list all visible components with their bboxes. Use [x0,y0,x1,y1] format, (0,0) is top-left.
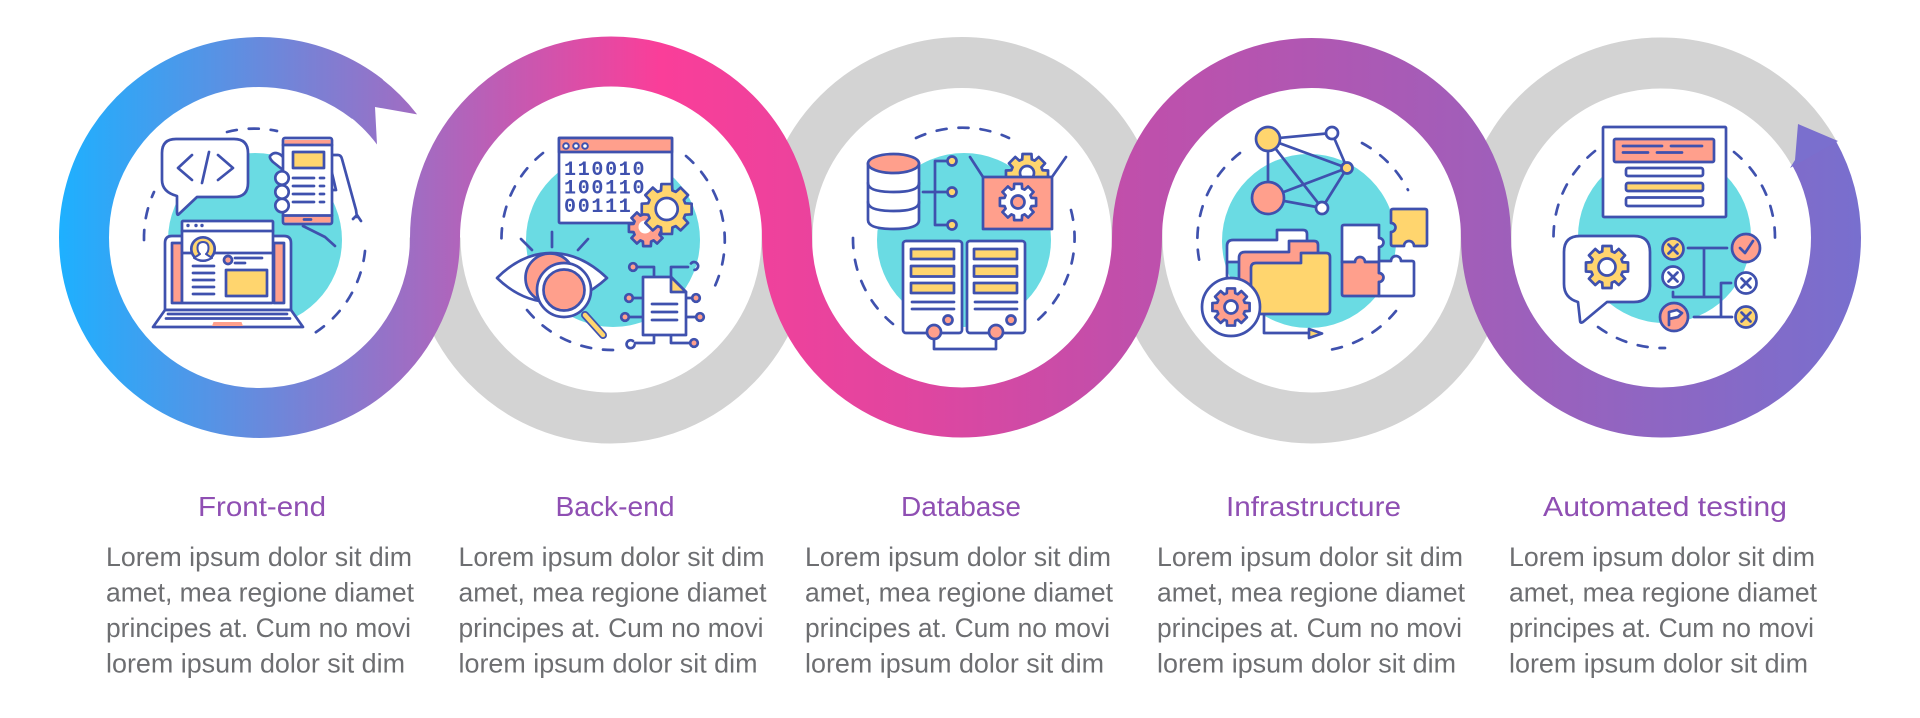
connection tree [923,156,956,230]
ribbon tail [1790,124,1838,168]
body text [458,542,767,678]
body text [106,542,414,678]
body text: amet, mea regione diamet [106,578,414,608]
servers [903,241,1025,349]
step: Front-end [106,491,414,678]
heading: Back-end [556,491,674,522]
gear speech bubble [1564,236,1650,323]
body text: amet, mea regione diamet [458,578,767,608]
gear badge [1202,278,1260,336]
eye with magnifier [497,232,607,335]
icon: front-end [144,129,365,334]
body text: lorem ipsum dolor sit dim [1157,648,1456,678]
arrow head [346,74,417,144]
body text: Lorem ipsum dolor sit dim [1157,542,1463,572]
settings box [970,154,1066,229]
body text: principes at. Cum no movi [106,613,411,643]
step: Automated testing [1509,491,1817,678]
heading: Database [901,491,1021,522]
step: Infrastructure [1157,491,1465,678]
icon: infrastructure [1197,127,1427,350]
body text [1509,542,1817,678]
body text: lorem ipsum dolor sit dim [106,648,405,678]
binary code window: 100110 [564,178,646,200]
icon: automated testing [1553,127,1775,348]
binary code window: 00111 [564,196,633,219]
binary code window: 110010 [564,159,646,182]
document with circuit [621,262,704,348]
body text: principes at. Cum no movi [1157,613,1462,643]
body text: Lorem ipsum dolor sit dim [106,542,412,572]
laptop [153,221,303,327]
decision tree [1660,234,1760,331]
body text: amet, mea regione diamet [805,578,1113,608]
grey ribbon [435,62,1814,418]
puzzle pieces [1342,209,1427,296]
icon: database [853,128,1075,349]
body text: lorem ipsum dolor sit dim [1509,648,1808,678]
body text: amet, mea regione diamet [1157,578,1465,608]
body text: principes at. Cum no movi [458,613,764,643]
body text [1157,542,1465,678]
report window [1603,127,1726,217]
arrow [1264,312,1322,338]
body text: amet, mea regione diamet [1509,578,1817,608]
heading: Infrastructure [1226,491,1401,522]
heading: Front-end [198,491,326,522]
icon: back-end [497,138,725,350]
binary code window [559,138,672,223]
step: Database [805,491,1113,678]
gradient ribbon [84,62,1838,413]
code speech bubble [162,139,248,215]
body text: Lorem ipsum dolor sit dim [458,542,764,572]
body text: Lorem ipsum dolor sit dim [1509,542,1815,572]
folders [1227,230,1330,314]
body text [805,542,1113,678]
body text: Lorem ipsum dolor sit dim [805,542,1111,572]
network graph [1252,127,1352,214]
body text: lorem ipsum dolor sit dim [805,648,1104,678]
body text: principes at. Cum no movi [1509,613,1814,643]
database cylinder [868,154,919,229]
body text: lorem ipsum dolor sit dim [458,648,758,678]
heading: Automated testing [1543,491,1787,522]
smartphone in hand [270,138,361,246]
gears [629,184,692,246]
step: Back-end [458,491,767,678]
body text: principes at. Cum no movi [805,613,1110,643]
